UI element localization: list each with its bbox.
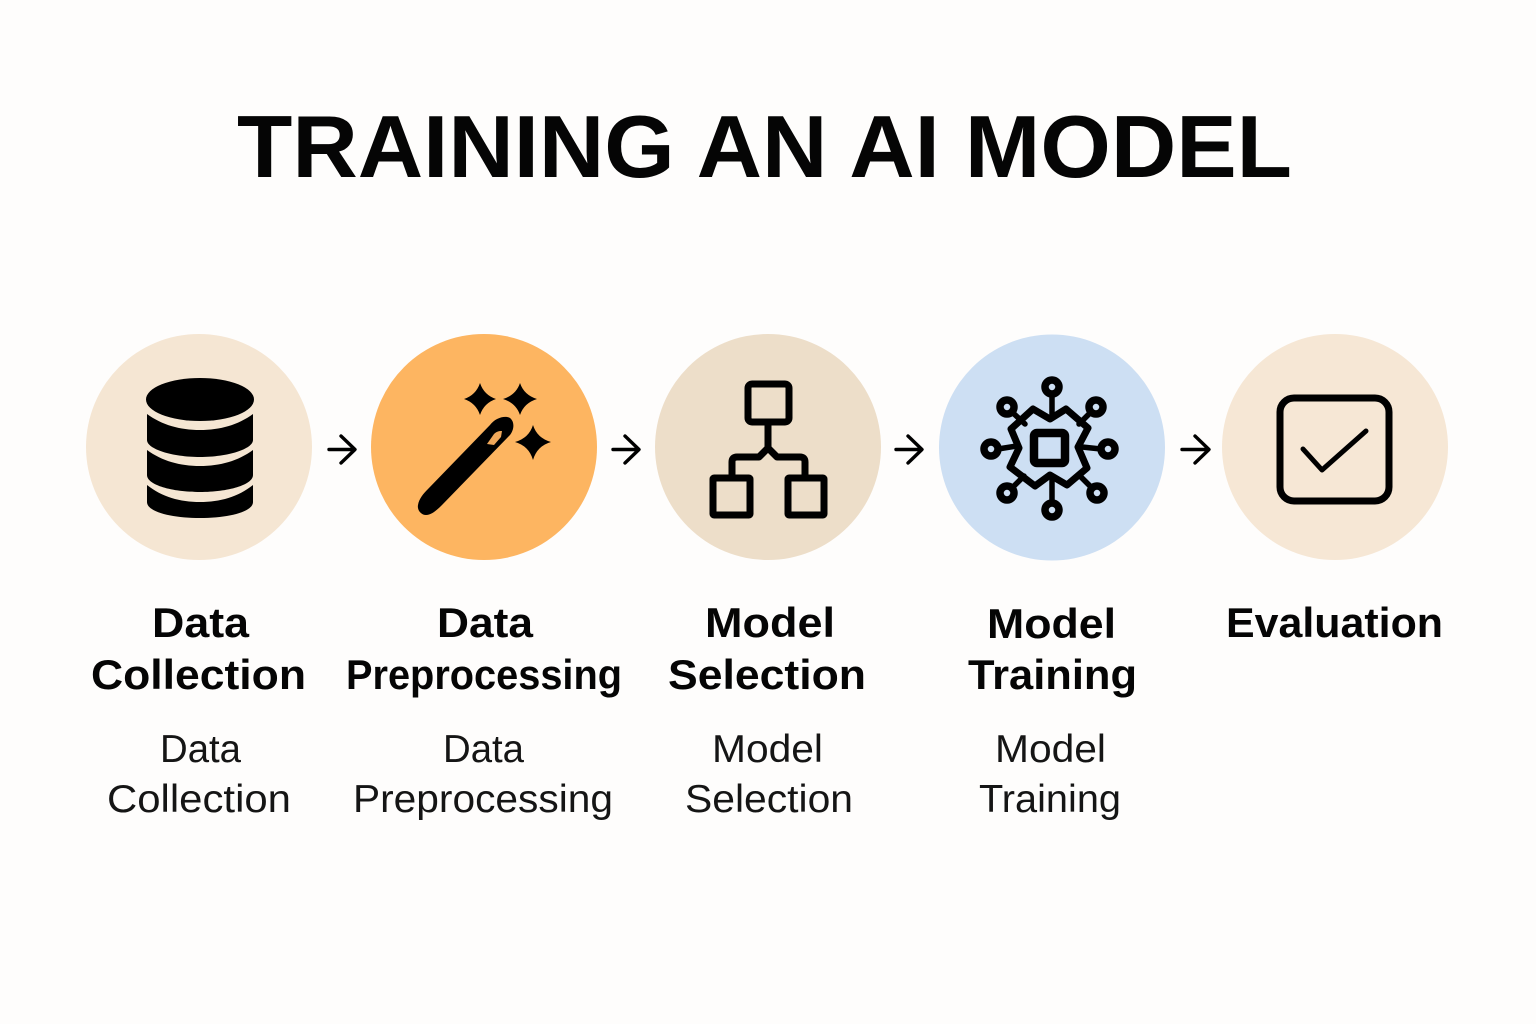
- step 5: evaluation: [1222, 334, 1448, 646]
- circle: model selection: [655, 334, 881, 560]
- heading: data preprocessing: Preprocessing: [346, 651, 622, 698]
- circle: model training: [939, 334, 1165, 560]
- arrow 4: [1182, 436, 1209, 463]
- circle: data collection: [86, 334, 312, 560]
- description: data collection: Collection: [107, 778, 291, 821]
- description: data preprocessing: Preprocessing: [353, 778, 613, 821]
- step 4: model training: [939, 334, 1165, 821]
- description: model selection: Selection: [685, 778, 853, 821]
- arrow 3: [896, 436, 922, 463]
- heading: data collection: [91, 599, 306, 698]
- step 3: model selection: [655, 334, 881, 821]
- circle: data preprocessing: [371, 334, 597, 560]
- heading: data collection: Collection: [91, 651, 306, 698]
- heading: data preprocessing: [346, 599, 622, 698]
- description: data collection: Data: [160, 728, 241, 771]
- arrow 1: [329, 436, 355, 463]
- heading: evaluation: Evaluation: [1226, 599, 1443, 646]
- icon: magic wand with sparkles: [418, 383, 551, 515]
- heading: data preprocessing: Data: [437, 599, 534, 646]
- icon: checkbox: [1280, 398, 1389, 501]
- description: model training: [979, 728, 1121, 821]
- heading: model selection: Selection: [668, 651, 866, 698]
- icon: hierarchy diagram: [713, 384, 824, 515]
- arrow 2: [613, 436, 639, 463]
- step 2: data preprocessing: [346, 334, 622, 821]
- icon: neural chip: [984, 380, 1115, 517]
- step 1: data collection: [86, 334, 312, 821]
- description: data collection: [107, 728, 291, 821]
- heading: model training: [968, 600, 1137, 698]
- description: model training: Training: [979, 778, 1121, 821]
- title: TRAINING AN AI MODEL: [237, 97, 1292, 196]
- description: model selection: Model: [712, 728, 823, 771]
- description: data preprocessing: [353, 728, 613, 821]
- description: model training: Model: [995, 728, 1106, 771]
- circle: evaluation: [1222, 334, 1448, 560]
- heading: model training: Training: [968, 651, 1137, 698]
- description: data preprocessing: Data: [443, 728, 524, 771]
- heading: model training: Model: [987, 600, 1116, 647]
- heading: model selection: Model: [705, 599, 835, 646]
- heading: data collection: Data: [152, 599, 250, 646]
- description: model selection: [685, 728, 853, 821]
- heading: model selection: [668, 599, 866, 698]
- icon: database: [146, 378, 254, 518]
